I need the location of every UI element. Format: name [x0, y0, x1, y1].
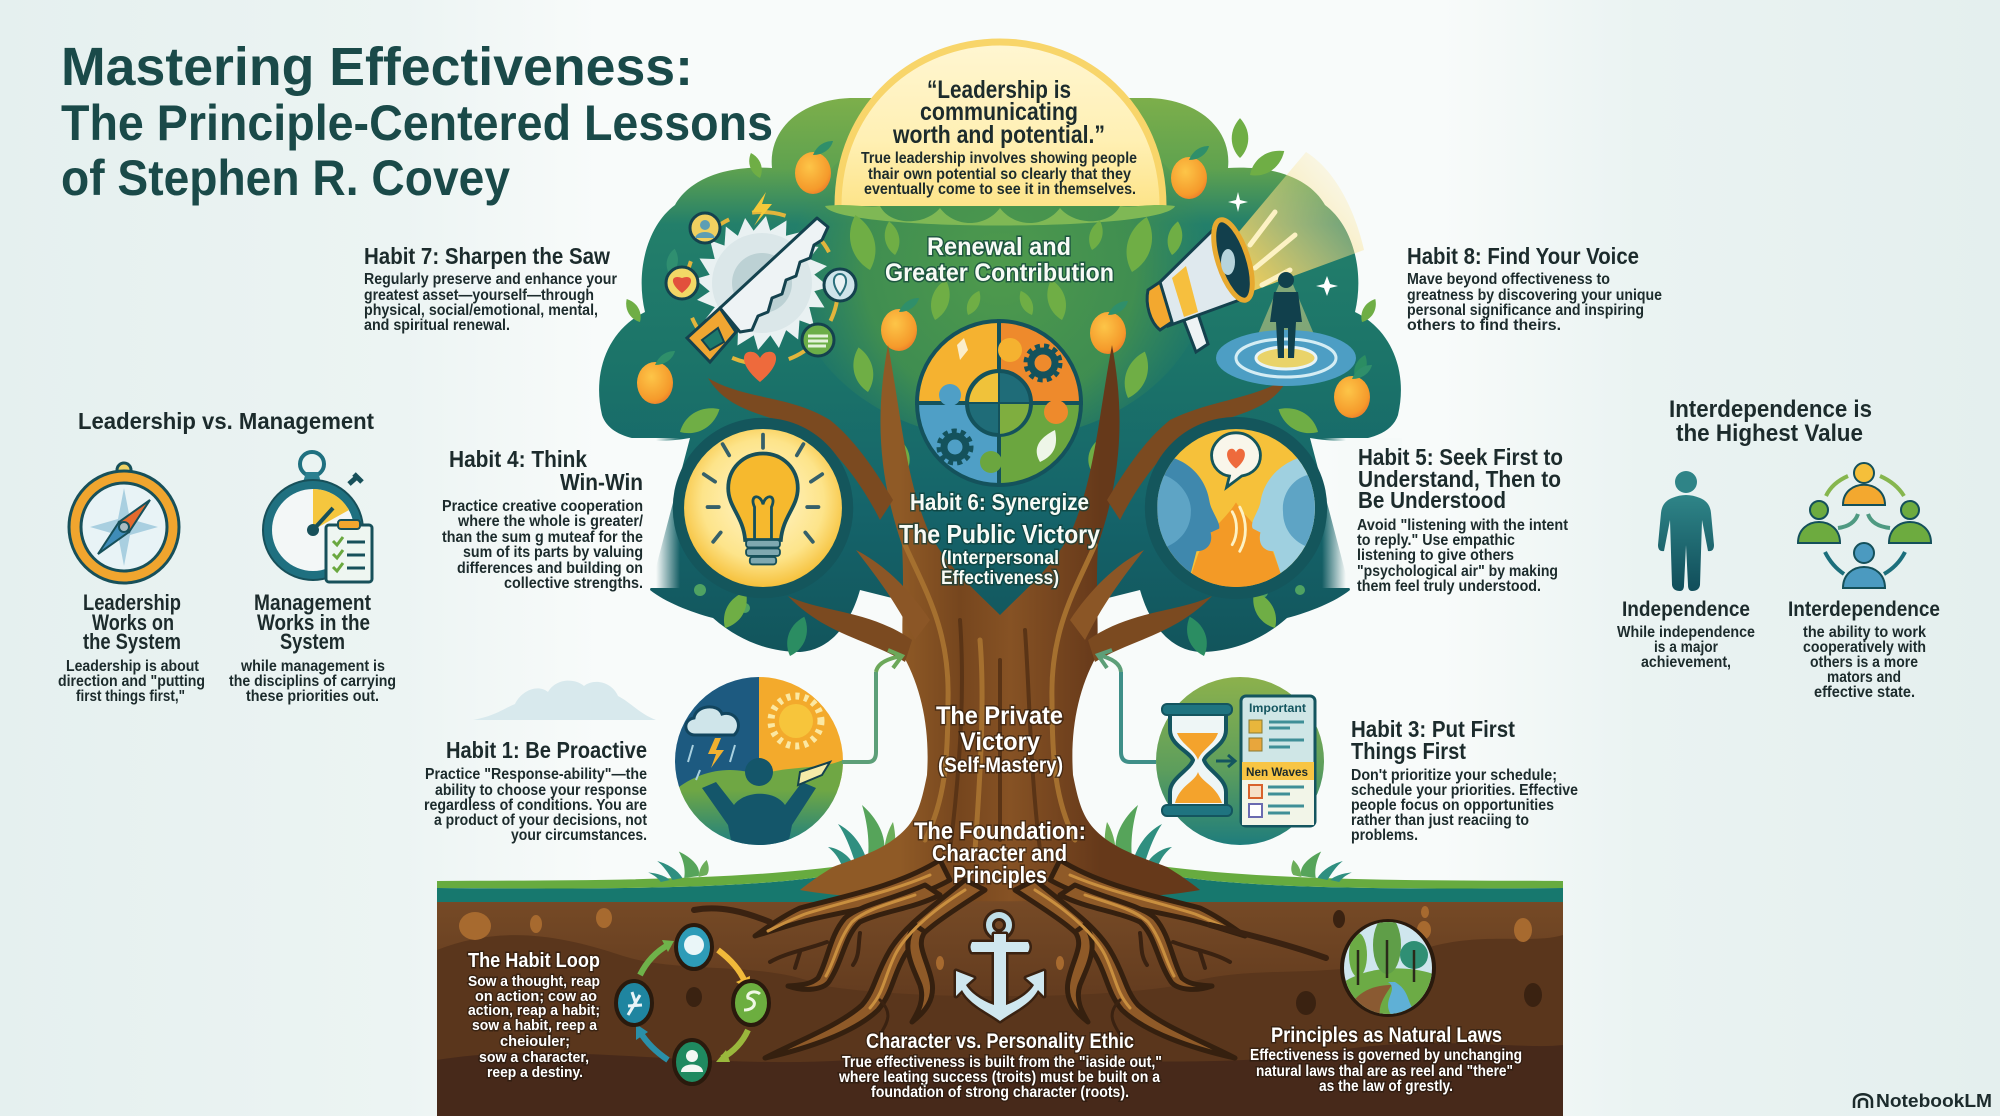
text: Management column: these priorities out. [246, 688, 379, 705]
text: Habit 5: to reply." Use empathic [1357, 532, 1515, 549]
icon: saw (Habit 7) [666, 192, 856, 382]
text: Habit 5: Understand, Then to [1358, 466, 1561, 492]
text: Principles as Natural Laws [1250, 1024, 1522, 1095]
arrow: Habit 1 to trunk [842, 650, 902, 762]
icon: independent person [1658, 471, 1714, 591]
text: Character vs. Personality Ethic: where leating success (troits) must be built on a [838, 1069, 1160, 1086]
text: Habit 3: people focus on opportunities [1351, 797, 1554, 814]
text: Principles as Natural Laws: natural laws thal are as reel and "there" [1256, 1063, 1513, 1080]
text: Interdependence: others is a more [1810, 654, 1918, 671]
title: Mastering Effectiveness: [61, 37, 693, 97]
heading: Interdependence [1669, 396, 1872, 447]
text: Principles as Natural Laws: Effectiveness is governed by unchanging [1250, 1047, 1522, 1064]
text: The Habit Loop: sow a character, [479, 1049, 589, 1066]
text: Interdependence: effective state. [1814, 684, 1915, 701]
quote sun: communicating [920, 98, 1078, 126]
text: Management column: while management is [240, 658, 385, 675]
text: Habit 5: Habit 5: Seek First to [1358, 444, 1563, 470]
grass tufts [648, 805, 1352, 882]
text: Character vs. Personality Ethic [838, 1030, 1162, 1101]
icon: compass [69, 463, 179, 583]
text: Habit 5: Be Understood [1358, 487, 1506, 513]
icon: listening faces (Habit 5) [1145, 417, 1327, 599]
icon: puzzle (Habit 6) [917, 321, 1081, 485]
center labels on tree: The Foundation: [914, 818, 1086, 845]
text: Principles as Natural Laws: Principles as Natural Laws [1271, 1024, 1502, 1047]
text: Habit 3: problems. [1351, 827, 1418, 844]
text: Habit 4: differences and building on [457, 560, 643, 577]
text: The Habit Loop: sow a habit, reep a [472, 1017, 598, 1034]
text: Habit 1: regardless of conditions. You are [424, 797, 647, 814]
text: Habit 7 [364, 243, 617, 334]
text: Habit 4: sum of its parts by valuing [463, 544, 643, 561]
text: Habit 5: Avoid "listening with the intent [1357, 517, 1569, 534]
icon: cloud [473, 681, 656, 720]
text: Character vs. Personality Ethic: Character vs. Personality Ethic [866, 1030, 1134, 1053]
text: Habit 1: ability to choose your response [435, 782, 647, 799]
text: Habit 5 [1357, 444, 1569, 595]
text: Habit 8: Habit 8: Find Your Voice [1407, 243, 1639, 269]
center labels on tree: (Interpersonal [941, 548, 1059, 569]
text: Leadership column [58, 590, 205, 705]
text: Habit 3 [1351, 716, 1578, 844]
icon: anchor [956, 915, 1044, 1021]
icon: hourglass and priority list (Habit 3) [1156, 677, 1324, 845]
text: Habit 5: them feel truly understood. [1357, 578, 1541, 595]
text: Habit 8: Mave beyond offectiveness to [1407, 271, 1610, 288]
text: Leadership column: direction and "putting [58, 673, 205, 690]
tree roots [694, 860, 1326, 1058]
leaves [622, 118, 1380, 659]
center labels on tree: The Private [936, 702, 1063, 730]
text: The Habit Loop: action, reap a habit; [468, 1002, 600, 1019]
center labels on tree: (Self-Mastery) [938, 754, 1063, 777]
icon: megaphone and person (Habit 8) [1147, 152, 1364, 386]
tree trunk and branches [708, 345, 1288, 901]
text: Leadership column: Leadership [83, 590, 181, 615]
text: Habit 7: Regularly preserve and enhance your [364, 271, 617, 288]
quote sun: “Leadership is [927, 76, 1071, 104]
text: Independence: While independence [1617, 624, 1755, 641]
center labels on tree: Greater Contribution [885, 259, 1114, 287]
text: Character vs. Personality Ethic: foundation of strong character (roots). [871, 1084, 1129, 1101]
text: Habit 3: schedule your priorities. Effective [1351, 782, 1578, 799]
text: Habit 8: greatness by discovering your unique [1407, 287, 1662, 304]
text: Habit 3: Habit 3: Put First [1351, 716, 1515, 742]
quote sun: eventually come to see it in themselves. [864, 181, 1136, 198]
quote sun: True leadership involves showing people [861, 150, 1137, 167]
center labels on tree [885, 233, 1114, 888]
text: Habit 1: your circumstances. [511, 827, 647, 844]
text: Independence [1617, 598, 1755, 671]
icon: light bulb (Habit 4) [673, 418, 853, 598]
heading: Interdependence: Interdependence is [1669, 396, 1872, 423]
text: Interdependence: mators and [1827, 669, 1901, 686]
title: The Principle-Centered Lessons [61, 95, 773, 151]
icon: hourglass and priority list (Habit 3): Nen Waves [1246, 765, 1308, 779]
center labels on tree: The Public Victory [899, 519, 1100, 549]
text: Habit 7: greatest asset—yourself—through [364, 287, 594, 304]
title: of Stephen R. Covey [61, 150, 510, 206]
text: Character vs. Personality Ethic: True effectiveness is built from the "iaside out," [842, 1054, 1162, 1071]
text: Habit 3: Don't prioritize your schedule; [1351, 767, 1557, 784]
text: Leadership column: Works on [92, 610, 174, 635]
center labels on tree: Renewal and [927, 233, 1071, 261]
text: Habit 5: "psychological air" by making [1357, 563, 1558, 580]
heading: Leadership vs. Management: Leadership vs. Management [78, 408, 374, 434]
icon: stopwatch with clipboard [263, 452, 372, 582]
text: Independence: achievement, [1641, 654, 1731, 671]
quote sun: worth and potential.” [892, 121, 1105, 149]
text: Leadership column: first things first," [76, 688, 185, 705]
canopy [599, 98, 1402, 652]
text: Habit 5: listening to give others [1357, 547, 1514, 564]
text: Habit 1 [424, 737, 648, 844]
text: Habit 1: Habit 1: Be Proactive [446, 737, 647, 763]
text: Interdependence [1788, 598, 1940, 701]
text: Habit 3: rather than just reaciing to [1351, 812, 1529, 829]
text: Habit 7: and spiritual renewal. [364, 317, 510, 334]
icon: hourglass and priority list (Habit 3): Important [1249, 701, 1306, 715]
center labels on tree: Character and [932, 840, 1067, 866]
center labels on tree: Victory [960, 728, 1040, 756]
icon: natural laws landscape [1340, 916, 1436, 1017]
icon: weather and person (Habit 1) [675, 677, 843, 845]
text: Habit 4: where the whole is greater/ [457, 513, 643, 530]
text: Habit 4: Habit 4: Think [449, 446, 587, 472]
text: Interdependence: cooperatively with [1803, 639, 1926, 656]
text: Independence: is a major [1654, 639, 1718, 656]
center labels on tree: Habit 6: Synergize [910, 489, 1089, 515]
text: Habit 7: Habit 7: Sharpen the Saw [364, 243, 610, 269]
text: Habit 1: a product of your decisions, not [434, 812, 648, 829]
heading: Interdependence: the Highest Value [1676, 420, 1863, 447]
text: Habit 1: Practice "Response-ability"—the [425, 766, 647, 783]
text: The Habit Loop: reep a destiny. [487, 1064, 583, 1081]
text: Management column: the disciplins of carrying [229, 673, 396, 690]
text: Management column: Works in the [257, 610, 370, 635]
text: The Habit Loop: cheiouler; [500, 1033, 570, 1050]
icon: interdependent group [1798, 463, 1931, 588]
arrow: Habit 3 to trunk [1098, 650, 1156, 762]
text: Habit 4: Practice creative cooperation [442, 498, 643, 515]
text: Interdependence: Interdependence [1788, 598, 1940, 621]
text: Management column: Management [254, 590, 372, 615]
fruits [637, 141, 1372, 418]
text: Habit 4: Win-Win [560, 469, 643, 495]
text: Leadership column: Leadership is about [66, 658, 200, 675]
text: Management column [229, 590, 396, 705]
quote sun: thair own potential so clearly that they [868, 166, 1131, 183]
text: Interdependence: the ability to work [1803, 624, 1926, 641]
text: Habit 4 [442, 446, 643, 592]
panel: soil and ground [437, 866, 1563, 1116]
text: Principles as Natural Laws: as the law of grestly. [1319, 1078, 1453, 1095]
icon: habit loop cycle [616, 925, 769, 1084]
text: Habit 4: than the sum g muteaf for the [442, 529, 643, 546]
text: The Habit Loop: Sow a thought, reap [468, 973, 600, 990]
center labels on tree: Principles [953, 862, 1047, 888]
logo: NotebookLM: NotebookLM [1876, 1091, 1992, 1111]
text: Independence: Independence [1622, 598, 1750, 621]
text: Habit 8 [1407, 243, 1662, 334]
title [61, 37, 773, 206]
text: Habit 8: personal significance and inspiring [1407, 302, 1644, 319]
text: Habit 4: collective strengths. [504, 575, 643, 592]
text: The Habit Loop: The Habit Loop [468, 950, 600, 972]
quote sun [825, 42, 1175, 226]
text: Habit 8: others to find theirs. [1407, 317, 1561, 334]
text: Habit 7: physical, social/emotional, mental, [364, 302, 598, 319]
center labels on tree: Effectiveness) [941, 568, 1059, 589]
text: The Habit Loop [468, 950, 600, 1081]
text: Leadership column: the System [83, 629, 181, 654]
text: Management column: System [280, 629, 345, 654]
text: The Habit Loop: on action; cow ao [475, 988, 597, 1005]
text: Habit 3: Things First [1351, 738, 1466, 764]
